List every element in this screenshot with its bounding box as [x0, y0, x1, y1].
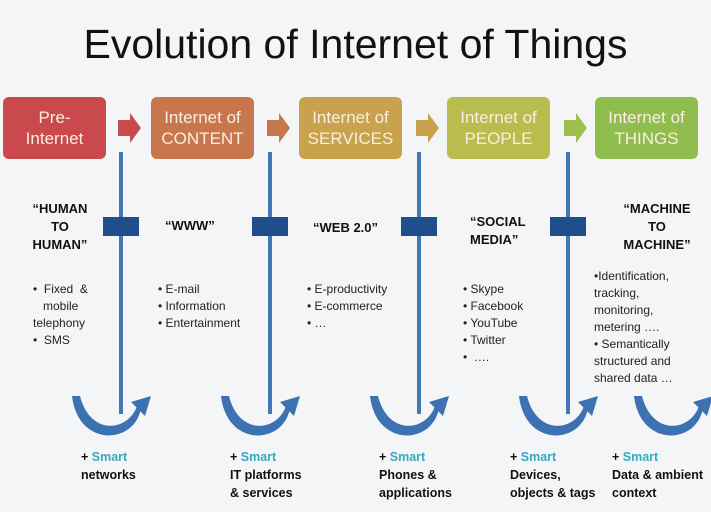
- quote: human: TO: [51, 219, 69, 234]
- smart 1: [81, 450, 136, 482]
- smart 2: IT platforms: [230, 468, 302, 482]
- box: people: [447, 97, 550, 159]
- list 5: • Semantically: [594, 337, 670, 351]
- list 4: • Facebook: [463, 299, 523, 313]
- list 4: • Twitter: [463, 333, 506, 347]
- list 5: monitoring,: [594, 303, 653, 317]
- box: services: SERVICES: [308, 129, 393, 148]
- list 3: [307, 282, 388, 330]
- smart 4: [510, 450, 595, 500]
- box: content: CONTENT: [161, 129, 244, 148]
- quote: social: “SOCIAL: [470, 214, 526, 229]
- list 5: shared data …: [594, 371, 673, 385]
- box: pre-internet: [3, 97, 106, 159]
- title: Evolution of Internet of Things: [84, 21, 627, 67]
- smart 5: context: [612, 486, 656, 500]
- quote: machine: TO: [648, 219, 666, 234]
- list 1: • Fixed &: [33, 282, 88, 296]
- box: things: THINGS: [614, 129, 679, 148]
- list 4: [463, 282, 524, 364]
- list 4: • YouTube: [463, 316, 517, 330]
- quote: machine: MACHINE”: [623, 237, 691, 252]
- box: content: Internet of: [164, 108, 241, 127]
- box: services: Internet of: [312, 108, 389, 127]
- quote: machine: [623, 201, 691, 252]
- smart 2: [230, 450, 302, 500]
- smart 5: [612, 450, 703, 500]
- list 3: • …: [307, 316, 327, 330]
- quote: human: “HUMAN: [33, 201, 87, 216]
- quote: social: [470, 214, 526, 247]
- smart 2: + Smart: [230, 450, 276, 464]
- list 2: • Information: [158, 299, 226, 313]
- list 5: •Identification,: [594, 269, 669, 283]
- list 3: • E-commerce: [307, 299, 383, 313]
- smart 1: networks: [81, 468, 136, 482]
- list 4: • Skype: [463, 282, 504, 296]
- quote: human: [33, 201, 87, 252]
- smart 2: & services: [230, 486, 293, 500]
- smart 3: + Smart: [379, 450, 425, 464]
- list 1: [33, 282, 88, 347]
- box: content: [151, 97, 254, 159]
- quote: web 2.0: “WEB 2.0”: [313, 220, 378, 235]
- list 1: • SMS: [33, 333, 70, 347]
- quote: social: MEDIA”: [470, 232, 518, 247]
- box: things: Internet of: [608, 108, 685, 127]
- smart 1: + Smart: [81, 450, 127, 464]
- quote: human: HUMAN”: [33, 237, 87, 252]
- smart 4: Devices,: [510, 468, 561, 482]
- list 5: [594, 269, 673, 385]
- box: things: [595, 97, 698, 159]
- list 5: tracking,: [594, 286, 639, 300]
- quote: www: “WWW”: [165, 218, 215, 233]
- list 4: • ….: [463, 350, 489, 364]
- smart 3: applications: [379, 486, 452, 500]
- smart 5: Data & ambient: [612, 468, 703, 482]
- quote: machine: “MACHINE: [623, 201, 691, 216]
- smart 4: + Smart: [510, 450, 556, 464]
- smart 3: Phones &: [379, 468, 437, 482]
- list 2: • Entertainment: [158, 316, 240, 330]
- list 5: structured and: [594, 354, 671, 368]
- box: services: [299, 97, 402, 159]
- list 5: metering ….: [594, 320, 659, 334]
- list 1: telephony: [33, 316, 85, 330]
- smart 3: [379, 450, 452, 500]
- smart 4: objects & tags: [510, 486, 595, 500]
- box: people: PEOPLE: [464, 129, 533, 148]
- smart 5: + Smart: [612, 450, 658, 464]
- box: people: Internet of: [460, 108, 537, 127]
- list 2: • E-mail: [158, 282, 200, 296]
- box: pre-internet: Internet: [26, 129, 83, 148]
- list 3: • E-productivity: [307, 282, 387, 296]
- list 2: [158, 282, 240, 330]
- box: pre-internet: Pre-: [38, 108, 71, 127]
- list 1: mobile: [43, 299, 78, 313]
